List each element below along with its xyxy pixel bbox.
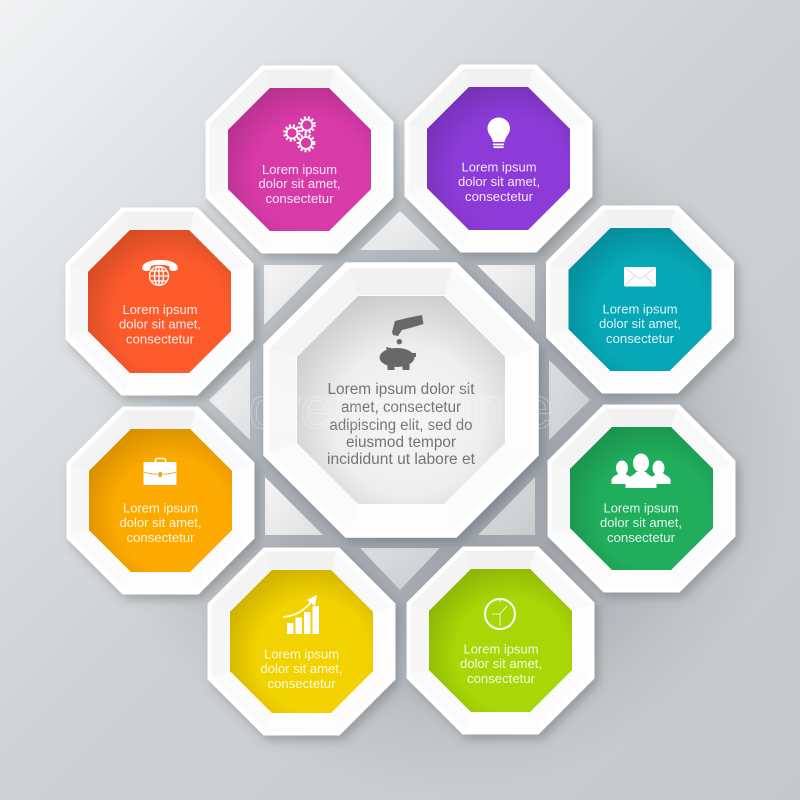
lime text xyxy=(460,642,542,686)
central frame xyxy=(264,263,538,537)
purple text: Lorem ipsum xyxy=(462,160,536,174)
magenta text: dolor sit amet, xyxy=(258,176,340,191)
panel: yellow growth chart xyxy=(208,548,395,735)
magenta text: consectetur xyxy=(266,191,334,206)
orange text: dolor sit amet, xyxy=(119,316,201,332)
green text xyxy=(600,500,682,545)
teal text: consectetur xyxy=(606,331,675,346)
icon: gears xyxy=(284,118,314,151)
panel: purple lightbulb xyxy=(405,65,592,252)
yellow text: consectetur xyxy=(268,676,336,691)
green text: dolor sit amet, xyxy=(600,515,682,530)
green face xyxy=(570,427,713,570)
icon: lightbulb xyxy=(488,118,510,148)
amber frame xyxy=(67,407,254,594)
amber text xyxy=(120,500,202,545)
panel: orange telephone xyxy=(66,208,253,395)
central text block: eiusmod tempor xyxy=(346,434,456,451)
icon: growth chart xyxy=(283,595,319,634)
purple text: consectetur xyxy=(465,189,534,204)
yellow text xyxy=(260,646,342,691)
central text block: adipiscing elit, sed do xyxy=(330,417,472,434)
teal text: Lorem ipsum xyxy=(602,302,678,316)
lime text: dolor sit amet, xyxy=(460,656,542,671)
orange text xyxy=(119,302,201,346)
central text block: incididunt ut labore et xyxy=(327,451,476,468)
central text block xyxy=(327,381,476,468)
icon: clock xyxy=(485,599,515,629)
amber text: dolor sit amet, xyxy=(120,515,202,530)
amber text: Lorem ipsum xyxy=(123,500,198,516)
purple face xyxy=(427,87,570,230)
magenta face xyxy=(228,88,371,231)
central face xyxy=(297,296,505,504)
teal face xyxy=(568,228,712,371)
icon: people xyxy=(612,454,670,488)
orange text: consectetur xyxy=(126,332,195,346)
icon: hand and piggy bank xyxy=(380,315,424,370)
purple text: dolor sit amet, xyxy=(458,174,540,189)
lime text: Lorem ipsum xyxy=(464,642,538,656)
amber face xyxy=(89,429,232,572)
green text: Lorem ipsum xyxy=(604,500,678,516)
lime face xyxy=(429,569,572,712)
central text block: amet, consectetur xyxy=(341,399,461,416)
teal text: dolor sit amet, xyxy=(599,316,681,331)
green frame xyxy=(548,405,735,592)
icon: envelope xyxy=(624,267,656,286)
orange text: Lorem ipsum xyxy=(122,302,198,317)
central text block: Lorem ipsum dolor sit xyxy=(328,381,475,398)
yellow text: Lorem ipsum xyxy=(264,646,339,662)
teal text xyxy=(599,302,681,346)
purple frame xyxy=(405,65,592,252)
panel: teal envelope xyxy=(546,206,734,393)
magenta text: Lorem ipsum xyxy=(262,162,337,177)
yellow frame xyxy=(208,548,395,735)
teal frame xyxy=(546,206,734,393)
orange face xyxy=(88,230,231,373)
central star tiles xyxy=(209,211,590,590)
green text: consectetur xyxy=(607,530,676,545)
orange frame xyxy=(66,208,253,395)
yellow face xyxy=(230,570,373,713)
panel: lime clock xyxy=(407,547,594,734)
panel: green people xyxy=(548,405,735,592)
purple text xyxy=(458,160,540,204)
watermark: dreamstime xyxy=(248,376,554,441)
magenta text xyxy=(258,162,340,206)
magenta frame xyxy=(206,66,393,253)
yellow text: dolor sit amet, xyxy=(260,661,342,676)
panel: amber briefcase xyxy=(67,407,254,594)
lime text: consectetur xyxy=(467,671,536,686)
icon: briefcase xyxy=(144,458,176,485)
panel: central octagon xyxy=(264,263,538,537)
icon: globe telephone xyxy=(142,260,178,286)
amber text: consectetur xyxy=(126,530,195,545)
panel: magenta gears xyxy=(206,66,393,253)
lime frame xyxy=(407,547,594,734)
